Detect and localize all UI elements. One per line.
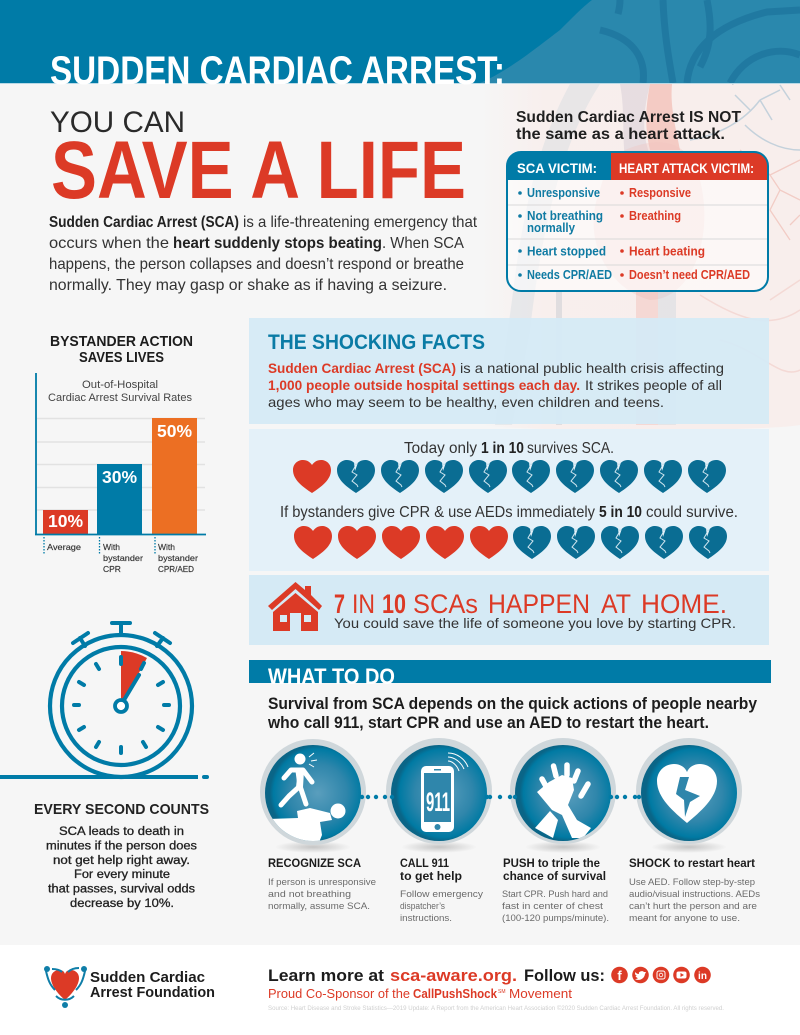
learn more line bbox=[268, 966, 605, 985]
text: today only 1 in 10: 1 in 10 bbox=[481, 440, 524, 457]
heart attack victim list: Heart beating bbox=[629, 244, 705, 258]
footer bbox=[0, 945, 800, 1035]
panel: SCA vs heart attack table bbox=[507, 152, 768, 291]
subline: You could save the life of someone you love by starting CPR. bbox=[334, 615, 736, 631]
co-sponsor line: Proud Co-Sponsor of the bbox=[268, 987, 410, 1001]
chart subtitle: Out-of-Hospital bbox=[82, 379, 158, 391]
co-sponsor line bbox=[268, 987, 573, 1001]
step: recognize SCA bbox=[268, 858, 376, 912]
facts text: ages who may seem to be healthy, even children and teens. bbox=[268, 394, 664, 410]
facts text: 1,000 people outside hospital settings each day. bbox=[268, 377, 580, 393]
step: push bbox=[502, 858, 609, 924]
bar labels: With bbox=[158, 542, 175, 552]
heart attack victim list: Breathing bbox=[629, 209, 681, 223]
text: today only 1 in 10 bbox=[404, 440, 614, 457]
what to do intro bbox=[267, 694, 757, 732]
facts text bbox=[268, 360, 724, 410]
bar labels bbox=[47, 542, 198, 574]
step: shock bbox=[629, 858, 760, 924]
connector dots bbox=[360, 795, 641, 799]
heading: bystander action: BYSTANDER ACTION bbox=[50, 333, 193, 350]
what to do intro: Survival from SCA depends on the quick actions of people nearby bbox=[268, 694, 757, 713]
step: push: Start CPR. Push hard and bbox=[502, 889, 608, 900]
comparison heading bbox=[516, 109, 742, 143]
hearts row: 5 in 10 bbox=[294, 526, 727, 559]
bar: with CPR/AED 50% bbox=[152, 418, 197, 534]
step: call 911: Follow emergency bbox=[400, 889, 483, 900]
heading band: what to do bbox=[249, 660, 771, 689]
bar labels: CPR bbox=[103, 564, 121, 574]
icon: house bbox=[268, 582, 322, 631]
learn more line: Learn more at bbox=[268, 966, 384, 985]
step: shock: can’t hurt the person and are bbox=[629, 901, 757, 912]
intro paragraph: Sudden Cardiac Arrest (SCA) bbox=[49, 214, 239, 231]
anatomical heart background illustration bbox=[480, 84, 800, 430]
heading: bystander action bbox=[50, 333, 193, 366]
headline: HOME. bbox=[641, 589, 727, 619]
headline bbox=[334, 589, 727, 619]
icon: CPR hands bbox=[510, 738, 616, 853]
text: today only 1 in 10: Today only bbox=[404, 440, 477, 457]
table header: heart attack victim bbox=[611, 152, 768, 180]
icon: stopwatch bbox=[0, 623, 207, 777]
header band bbox=[0, 0, 800, 84]
panel: survival hearts bbox=[249, 429, 769, 571]
bar: with CPR 30% bbox=[97, 464, 142, 534]
step: recognize SCA: RECOGNIZE SCA bbox=[268, 858, 361, 870]
SCA victim list: Not breathing bbox=[527, 209, 603, 223]
bar chart: survival rates bbox=[35, 373, 206, 574]
headline: SCAs bbox=[413, 589, 478, 619]
step: shock: Use AED. Follow step-by-step bbox=[629, 877, 755, 888]
icon: phone 911: 911 bbox=[426, 787, 450, 817]
comparison heading: Sudden Cardiac Arrest IS NOT bbox=[516, 109, 742, 126]
step: push: chance of survival bbox=[503, 871, 606, 883]
intro paragraph: happens, the person collapses and doesn’t respond or breathe bbox=[49, 256, 464, 273]
facts heading: THE SHOCKING FACTS bbox=[268, 330, 485, 354]
chart subtitle: Cardiac Arrest Survival Rates bbox=[48, 392, 192, 404]
intro paragraph: normally. They may gasp or shake as if having a seizure. bbox=[49, 277, 447, 294]
panel: 7 in 10 at home bbox=[249, 575, 769, 645]
what to do intro: who call 911, start CPR and use an AED to restart the heart. bbox=[267, 713, 709, 732]
bar labels: With bbox=[103, 542, 120, 552]
source line: Source: Heart Disease and Stroke Statistics—2019 Update: A Report from the American Heart Association ©2020 Sudden Cardiac Arrest Foundation. All rights reserved. bbox=[268, 1005, 724, 1012]
SCA victim list: Heart stopped bbox=[527, 244, 606, 258]
SCA victim list: Needs CPR/AED bbox=[527, 268, 612, 282]
co-sponsor line: Movement bbox=[509, 987, 573, 1001]
intro paragraph: heart suddenly stops beating bbox=[173, 235, 382, 252]
step: shock: SHOCK to restart heart bbox=[629, 858, 755, 870]
step: recognize SCA: If person is unresponsive bbox=[268, 877, 376, 888]
comparison heading: the same as a heart attack. bbox=[516, 126, 725, 143]
icon: phone 911 bbox=[386, 738, 492, 853]
step: push: fast in center of chest bbox=[502, 901, 603, 912]
learn more line: Follow us: bbox=[524, 966, 605, 985]
heart attack victim list: Responsive bbox=[629, 186, 691, 200]
heading: You can: YOU CAN bbox=[50, 106, 185, 139]
bar: average 10% bbox=[43, 510, 88, 534]
logo: Sudden Cardiac Arrest Foundation: Arrest Foundation bbox=[90, 985, 215, 1001]
SCA victim list bbox=[518, 186, 612, 282]
learn more line: sca-aware.org. bbox=[390, 966, 517, 985]
icon: AED heart bbox=[636, 738, 742, 853]
headline: IN bbox=[352, 589, 375, 619]
bar: with CPR/AED 50%: 50% bbox=[157, 421, 192, 441]
chart subtitle bbox=[48, 379, 192, 404]
step: call 911: CALL 911 bbox=[400, 858, 450, 870]
bar: average 10%: 10% bbox=[48, 511, 83, 531]
panel: SCA vs heart attack table: SCA VICTIM: bbox=[517, 160, 597, 176]
headline: HAPPEN bbox=[488, 589, 590, 619]
bar labels: bystander bbox=[103, 553, 143, 563]
intro paragraph: occurs when the bbox=[49, 235, 169, 252]
facts text: is a national public health crisis affecting bbox=[460, 360, 724, 376]
SCA victim list: Unresponsive bbox=[527, 186, 600, 200]
text: if bystanders 5 in 10: If bystanders give CPR & use AEDs immediately bbox=[280, 504, 595, 521]
step: call 911: dispatcher’s bbox=[400, 901, 445, 912]
panel: the shocking facts bbox=[249, 318, 769, 424]
text: every second counts: EVERY SECOND COUNTS bbox=[34, 801, 209, 818]
step: recognize SCA: normally, assume SCA. bbox=[268, 901, 370, 912]
bar labels: Average bbox=[47, 542, 81, 552]
intro paragraph: is a life-threatening emergency that bbox=[243, 214, 478, 231]
intro paragraph: . When SCA bbox=[382, 235, 464, 252]
social icons bbox=[611, 967, 711, 983]
headline: 7 bbox=[334, 589, 345, 619]
facts text: Sudden Cardiac Arrest (SCA) bbox=[268, 360, 456, 376]
step: call 911: instructions. bbox=[400, 913, 452, 924]
co-sponsor line: CallPushShock bbox=[413, 987, 497, 1001]
table header: SCA victim bbox=[507, 152, 611, 180]
hearts row: 1 in 10 bbox=[293, 460, 726, 493]
step: recognize SCA: and not breathing bbox=[268, 889, 351, 900]
step: call 911: to get help bbox=[400, 871, 462, 883]
heading band: what to do: WHAT TO DO bbox=[268, 664, 395, 689]
heart attack victim list bbox=[620, 186, 750, 282]
heading: Save a life: SAVE A LIFE bbox=[51, 125, 466, 216]
step: call 911 bbox=[400, 858, 483, 924]
intro paragraph bbox=[49, 214, 478, 294]
step: shock: meant for anyone to use. bbox=[629, 913, 740, 924]
step: push: (100-120 pumps/minute). bbox=[502, 913, 609, 924]
step: push: PUSH to triple the bbox=[503, 858, 600, 870]
text: every second counts: For every minute bbox=[74, 869, 170, 881]
facts text: It strikes people of all bbox=[585, 377, 722, 393]
text: every second counts: decrease by 10%. bbox=[70, 898, 174, 910]
bar: with CPR 30%: 30% bbox=[102, 467, 137, 487]
social icons: in bbox=[698, 971, 707, 982]
step: shock: audio/visual instructions. AEDs bbox=[629, 889, 760, 900]
icon: recognize SCA bbox=[260, 739, 366, 853]
heading: bystander action: SAVES LIVES bbox=[79, 349, 164, 366]
logo: Sudden Cardiac Arrest Foundation bbox=[44, 966, 215, 1008]
headline: 10 bbox=[382, 589, 406, 619]
text: if bystanders 5 in 10: could survive. bbox=[646, 504, 738, 521]
SCA victim list: normally bbox=[527, 221, 575, 235]
heart attack victim list: Doesn’t need CPR/AED bbox=[629, 268, 750, 282]
text: every second counts: not get help right away. bbox=[53, 855, 190, 867]
text: every second counts: SCA leads to death in bbox=[59, 826, 184, 838]
text: every second counts: that passes, survival odds bbox=[48, 884, 195, 896]
logo: Sudden Cardiac Arrest Foundation: Sudden Cardiac bbox=[90, 970, 205, 986]
text: every second counts: minutes if the person does bbox=[46, 840, 197, 852]
bar labels: bystander bbox=[158, 553, 198, 563]
bar labels: CPR/AED bbox=[158, 564, 194, 574]
text: if bystanders 5 in 10: 5 in 10 bbox=[599, 504, 642, 521]
text: every second counts bbox=[34, 801, 209, 910]
co-sponsor line: SM bbox=[498, 989, 506, 995]
social icons: f bbox=[617, 968, 622, 983]
title: Sudden Cardiac Arrest: SUDDEN CARDIAC ARREST: bbox=[50, 49, 505, 93]
text: today only 1 in 10: survives SCA. bbox=[527, 440, 614, 457]
headline: AT bbox=[601, 589, 631, 619]
panel: SCA vs heart attack table: HEART ATTACK VICTIM: bbox=[619, 160, 754, 176]
